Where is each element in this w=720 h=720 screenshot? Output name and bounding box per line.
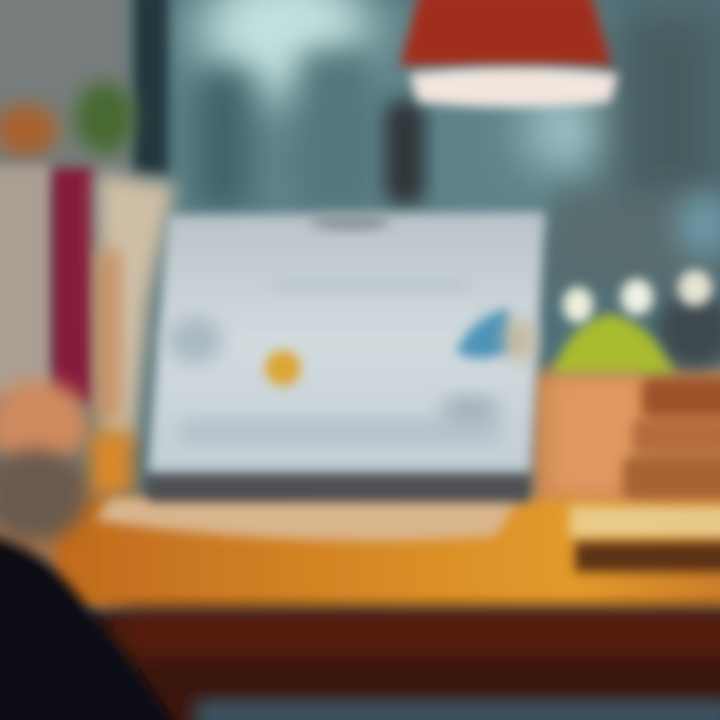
warm lower backdrop	[0, 370, 720, 570]
yellow dot	[265, 350, 301, 386]
books lying on desk	[570, 506, 720, 572]
frog figurine and ornaments	[552, 270, 720, 374]
peach box	[552, 378, 642, 493]
under desk shadow	[90, 612, 720, 720]
laptop screen	[148, 212, 545, 472]
desk surface	[55, 500, 720, 608]
blue chart shape	[456, 308, 512, 359]
screen chart blotches	[167, 213, 500, 444]
potted plants on the shelf	[0, 82, 135, 156]
laptop keyboard deck	[95, 498, 520, 540]
laptop base hinge	[146, 470, 530, 502]
laptop	[95, 212, 545, 540]
desk lamp	[385, 0, 618, 205]
dark foreground silhouette	[0, 535, 185, 720]
hand and sleeve	[0, 380, 90, 541]
stack of upright books	[0, 165, 176, 495]
left wall and dark window frame	[0, 0, 168, 180]
brown stacked items	[622, 378, 720, 500]
